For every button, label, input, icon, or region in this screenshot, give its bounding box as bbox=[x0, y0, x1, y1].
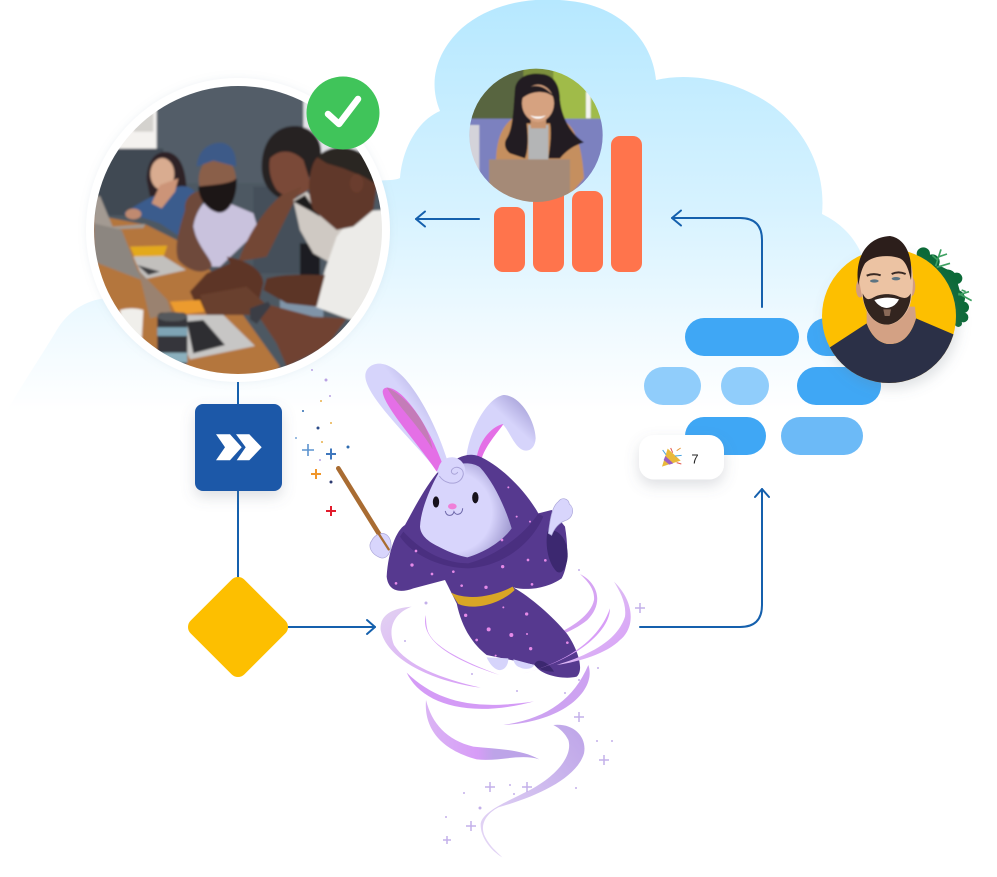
background cloud bbox=[6, 0, 880, 420]
woman in back bbox=[147, 152, 187, 197]
sparkle dots bbox=[295, 369, 350, 484]
foot shadow bbox=[534, 661, 554, 672]
robe bbox=[387, 455, 580, 678]
watch bbox=[250, 302, 271, 324]
pill bars bbox=[644, 318, 881, 455]
arrow: diamond to wizard bbox=[288, 620, 375, 634]
woman leaning bbox=[262, 126, 321, 198]
hands bbox=[370, 499, 573, 558]
t-shirt bbox=[828, 318, 955, 387]
arrow: pills to chart bbox=[672, 210, 762, 307]
bar chart bbox=[494, 136, 642, 272]
man with cap bbox=[193, 197, 258, 267]
photo: woman with laptop bbox=[467, 67, 607, 207]
swirls over robe bbox=[522, 582, 631, 674]
reaction count: 7 bbox=[691, 452, 699, 466]
wand bbox=[338, 468, 387, 547]
front laptop bbox=[138, 270, 172, 318]
wand sparkles bbox=[302, 444, 336, 516]
hands bbox=[190, 257, 263, 316]
wizard rabbit mascot bbox=[338, 364, 631, 857]
icon: party popper bbox=[662, 448, 682, 467]
reaction badge bbox=[639, 435, 724, 480]
far laptop bbox=[94, 196, 145, 229]
wand tip over hand bbox=[377, 532, 389, 549]
hair curl bbox=[438, 457, 465, 483]
robe stars bbox=[395, 486, 569, 657]
beard bbox=[863, 293, 911, 325]
sleeve opening bbox=[547, 530, 568, 573]
arrow: chart to team photo bbox=[416, 212, 479, 226]
green check badge bbox=[306, 76, 380, 150]
hood shadow bbox=[400, 513, 543, 568]
decision diamond bbox=[184, 573, 292, 681]
automation chevron tile bbox=[195, 404, 282, 491]
brows and eyes bbox=[867, 272, 906, 283]
neck bbox=[867, 307, 916, 344]
arrow: wizard to pills bbox=[640, 489, 769, 627]
connector: team photo to diamond bbox=[237, 380, 239, 578]
head bbox=[859, 253, 913, 325]
leaves bbox=[917, 247, 972, 327]
middle laptop bbox=[94, 223, 142, 280]
eyes and mouth bbox=[433, 492, 478, 515]
photo: team around a table bbox=[90, 83, 390, 380]
yellow notebook bbox=[130, 246, 167, 258]
feet bbox=[487, 657, 534, 670]
ears bbox=[365, 364, 536, 473]
whirlwind plus signs bbox=[404, 569, 645, 844]
portrait: smiling man bbox=[822, 236, 972, 387]
man in white tee bbox=[314, 208, 382, 321]
belt bbox=[451, 587, 515, 607]
ears bbox=[856, 277, 915, 298]
face bbox=[420, 463, 512, 557]
whirlwind swirls bbox=[381, 574, 597, 857]
table bbox=[90, 214, 280, 380]
hair bbox=[858, 236, 911, 285]
team photo with white ring bbox=[86, 78, 390, 382]
white cup bbox=[120, 308, 143, 340]
tumbler bbox=[157, 313, 187, 366]
